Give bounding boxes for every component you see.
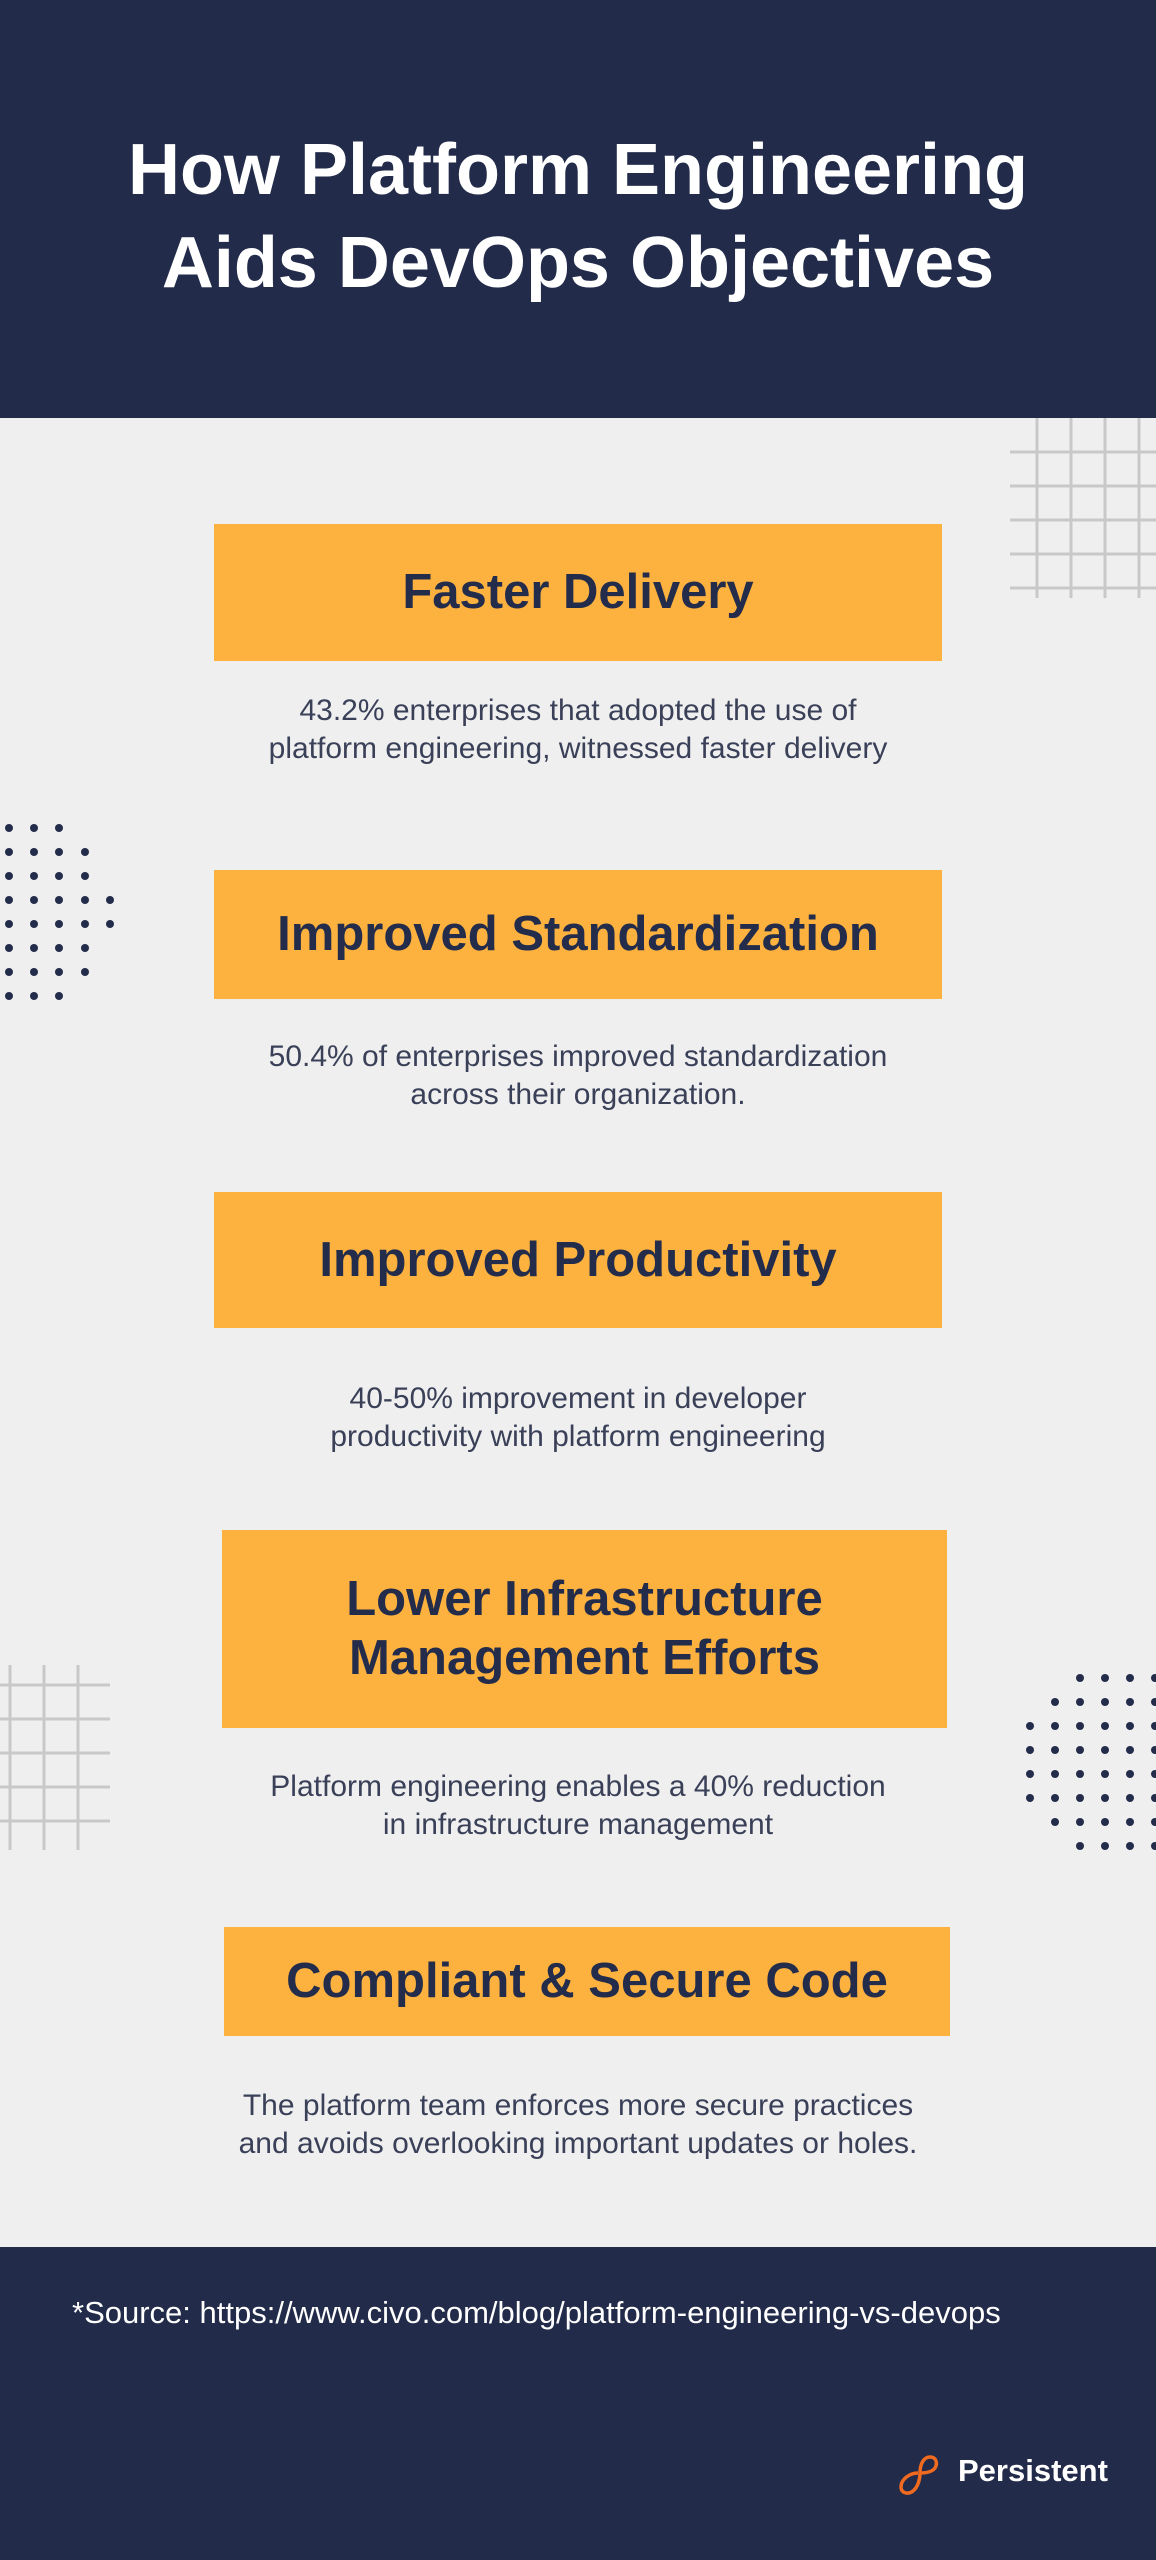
header banner (0, 0, 1156, 418)
footer (0, 2247, 1156, 2560)
logo: Persistent (899, 2453, 1108, 2495)
heading: Improved Productivity (214, 1192, 942, 1328)
text: security note (239, 2089, 917, 2160)
decoration: grid top right (1010, 418, 1156, 598)
title: How Platform Engineering (128, 130, 1028, 210)
heading: Lower Infrastructure Management Efforts: Management Efforts (349, 1631, 820, 1685)
decoration: grid bottom left (0, 1665, 110, 1850)
title: Aids DevOps Objectives (162, 223, 994, 303)
heading: Faster Delivery (214, 524, 942, 661)
heading: Improved Productivity: Improved Productivity (319, 1233, 837, 1287)
source text: *Source: https://www.civo.com/blog/platform-engineering-vs-devops (72, 2295, 1001, 2330)
text: faster delivery stat: platform engineering, witnessed faster delivery (269, 732, 887, 765)
text: infrastructure stat: in infrastructure management (383, 1808, 773, 1841)
icon: infinity loop (899, 2455, 938, 2495)
decoration: dots right (1026, 1674, 1156, 1850)
text: standardization stat: 50.4% of enterprises improved standardization (269, 1040, 887, 1073)
text: faster delivery stat (269, 694, 888, 765)
text: productivity stat: productivity with platform engineering (330, 1420, 826, 1453)
text: security note: and avoids overlooking important updates or holes. (239, 2127, 917, 2160)
text: standardization stat (269, 1040, 887, 1111)
title (128, 130, 1028, 303)
heading: Compliant & Secure Code (224, 1927, 950, 2036)
text: productivity stat (330, 1382, 826, 1453)
heading: Improved Standardization (214, 870, 942, 999)
heading: Improved Standardization: Improved Standardization (277, 907, 879, 961)
heading: Lower Infrastructure Management Efforts: Lower Infrastructure (346, 1572, 823, 1626)
text: infrastructure stat (270, 1770, 886, 1841)
text: security note: The platform team enforces more secure practices (243, 2089, 913, 2122)
text: infrastructure stat: Platform engineering enables a 40% reduction (270, 1770, 886, 1803)
text: standardization stat: across their organization. (410, 1078, 746, 1111)
text: productivity stat: 40-50% improvement in developer (350, 1382, 806, 1415)
brand name: Persistent (958, 2453, 1108, 2488)
heading: Compliant & Secure Code: Compliant & Secure Code (286, 1954, 888, 2008)
text: faster delivery stat: 43.2% enterprises that adopted the use of (299, 694, 857, 727)
decoration: dots left (5, 824, 114, 1000)
heading: Lower Infrastructure Management Efforts (222, 1530, 947, 1728)
heading: Faster Delivery: Faster Delivery (402, 565, 754, 619)
